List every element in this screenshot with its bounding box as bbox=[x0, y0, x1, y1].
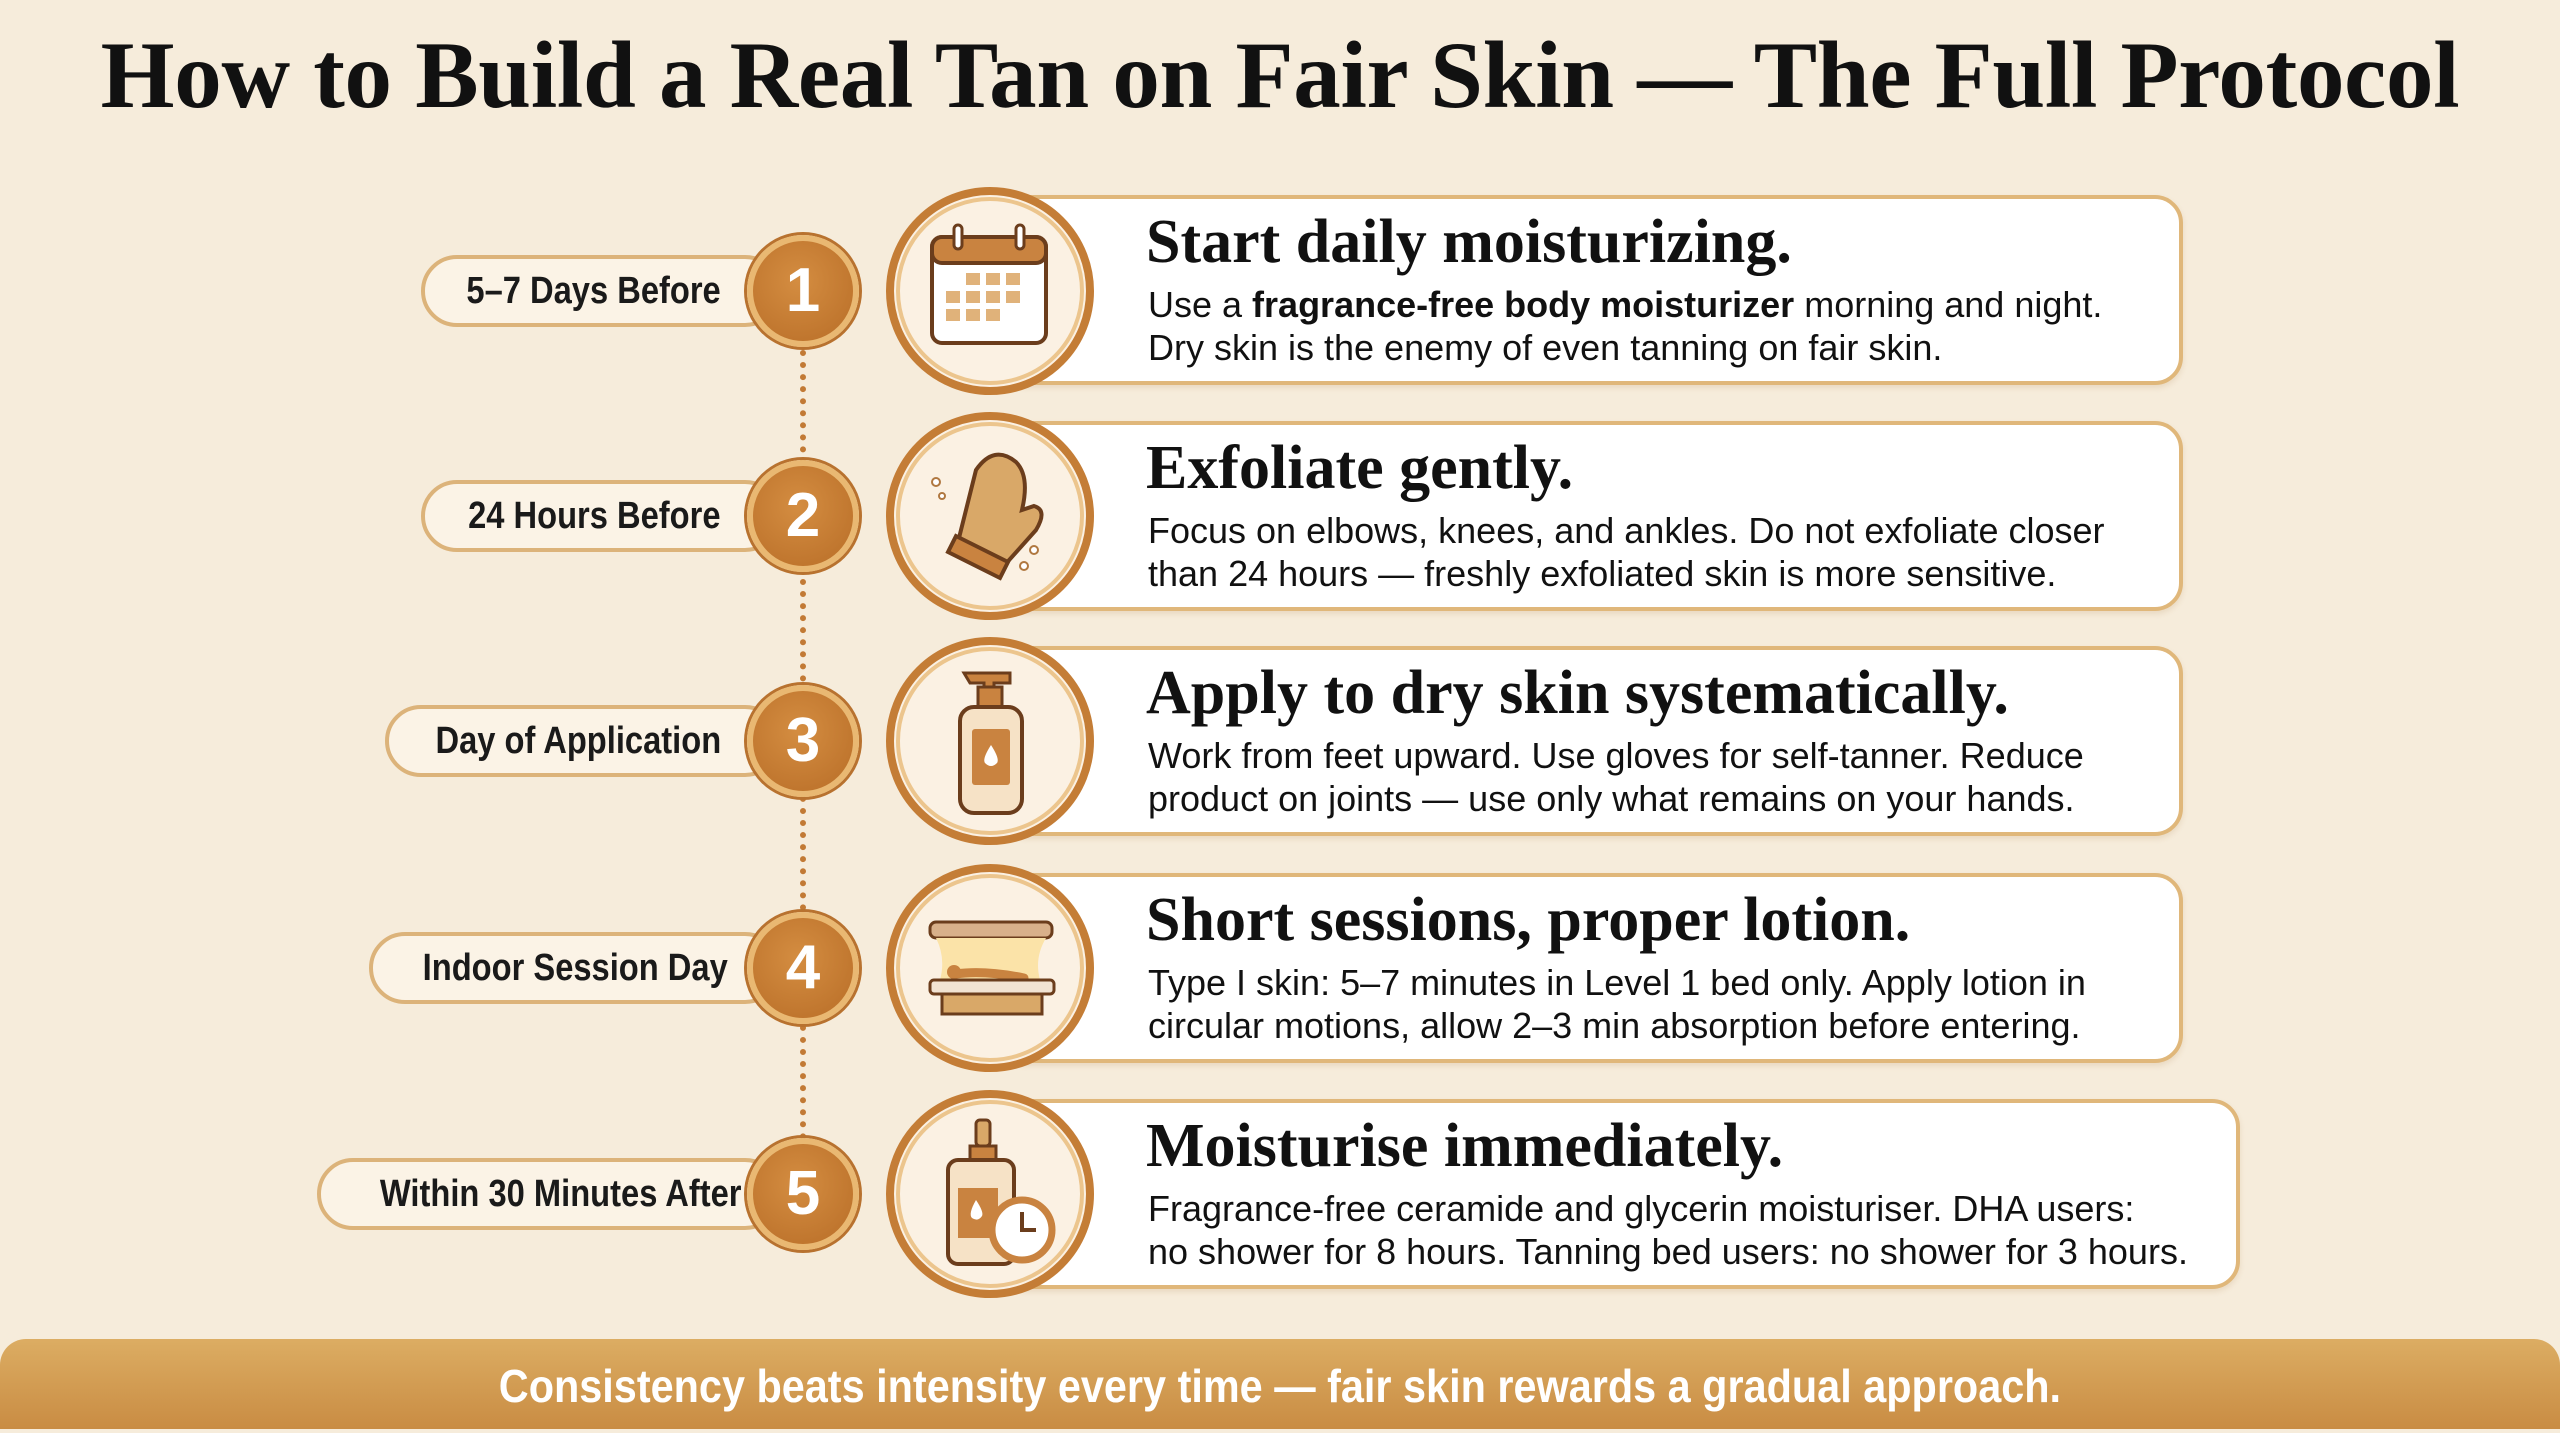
number badge 2: 2 bbox=[786, 481, 820, 550]
body 3: Work from feet upward. Use gloves for self-tanner. Reduce bbox=[1148, 735, 2084, 776]
number badge 5 bbox=[747, 1138, 859, 1250]
number badge 1: 1 bbox=[786, 256, 820, 325]
icon: moisturiser bottle and clock bbox=[886, 1090, 1094, 1298]
card 1 bbox=[1000, 195, 2183, 385]
number badge 1 bbox=[747, 235, 859, 347]
body 4 bbox=[1148, 962, 2086, 1046]
title: How to Build a Real Tan on Fair Skin — The Full Protocol bbox=[101, 22, 2459, 128]
body 3: product on joints — use only what remains on your hands. bbox=[1148, 778, 2075, 819]
label pill 4: Indoor Session Day bbox=[423, 947, 728, 989]
heading 3: Apply to dry skin systematically. bbox=[1146, 659, 2009, 727]
body 1: Use a fragrance-free body moisturizer morning and night. bbox=[1148, 284, 2102, 325]
heading 1: Start daily moisturizing. bbox=[1146, 208, 1792, 276]
label pill 2 bbox=[421, 480, 781, 552]
card 2 bbox=[1000, 421, 2183, 611]
icon: tanning bed bbox=[886, 864, 1094, 1072]
body 2 bbox=[1148, 510, 2105, 594]
heading 5: Moisturise immediately. bbox=[1146, 1112, 1783, 1180]
icon: calendar bbox=[886, 187, 1094, 395]
body 4: Type I skin: 5–7 minutes in Level 1 bed only. Apply lotion in bbox=[1148, 962, 2086, 1003]
body 1 bbox=[1148, 284, 2102, 368]
body 1: Dry skin is the enemy of even tanning on fair skin. bbox=[1148, 327, 1942, 368]
heading 2: Exfoliate gently. bbox=[1146, 434, 1573, 502]
number badge 4: 4 bbox=[786, 933, 820, 1002]
icon: exfoliating mitt bbox=[886, 412, 1094, 620]
heading 4: Short sessions, proper lotion. bbox=[1146, 886, 1910, 954]
card 5 bbox=[1000, 1099, 2240, 1289]
label pill 1 bbox=[421, 255, 781, 327]
number badge 3 bbox=[747, 685, 859, 797]
number badge 4 bbox=[747, 912, 859, 1024]
icon: lotion pump bottle bbox=[886, 637, 1094, 845]
number badge 5: 5 bbox=[786, 1159, 820, 1228]
body 5 bbox=[1148, 1188, 2188, 1272]
body 5: no shower for 8 hours. Tanning bed users: no shower for 3 hours. bbox=[1148, 1231, 2188, 1272]
card 3 bbox=[1000, 646, 2183, 836]
number badge 3: 3 bbox=[786, 706, 820, 775]
body 5: Fragrance-free ceramide and glycerin moisturiser. DHA users: bbox=[1148, 1188, 2134, 1229]
body 2: Focus on elbows, knees, and ankles. Do not exfoliate closer bbox=[1148, 510, 2105, 551]
label pill 4 bbox=[369, 932, 781, 1004]
body 4: circular motions, allow 2–3 min absorption before entering. bbox=[1148, 1005, 2080, 1046]
body 3 bbox=[1148, 735, 2084, 819]
label pill 1: 5–7 Days Before bbox=[467, 270, 721, 312]
label pill 5: Within 30 Minutes After bbox=[380, 1173, 742, 1215]
footer banner bbox=[0, 1339, 2560, 1429]
footer banner: Consistency beats intensity every time — fair skin rewards a gradual approach. bbox=[499, 1360, 2061, 1412]
card 4 bbox=[1000, 873, 2183, 1063]
number badge 2 bbox=[747, 460, 859, 572]
label pill 3: Day of Application bbox=[436, 720, 721, 762]
label pill 5 bbox=[317, 1158, 781, 1230]
body 2: than 24 hours — freshly exfoliated skin is more sensitive. bbox=[1148, 553, 2056, 594]
timeline dotted connector bbox=[800, 350, 806, 1140]
label pill 3 bbox=[385, 705, 781, 777]
label pill 2: 24 Hours Before bbox=[469, 495, 721, 537]
